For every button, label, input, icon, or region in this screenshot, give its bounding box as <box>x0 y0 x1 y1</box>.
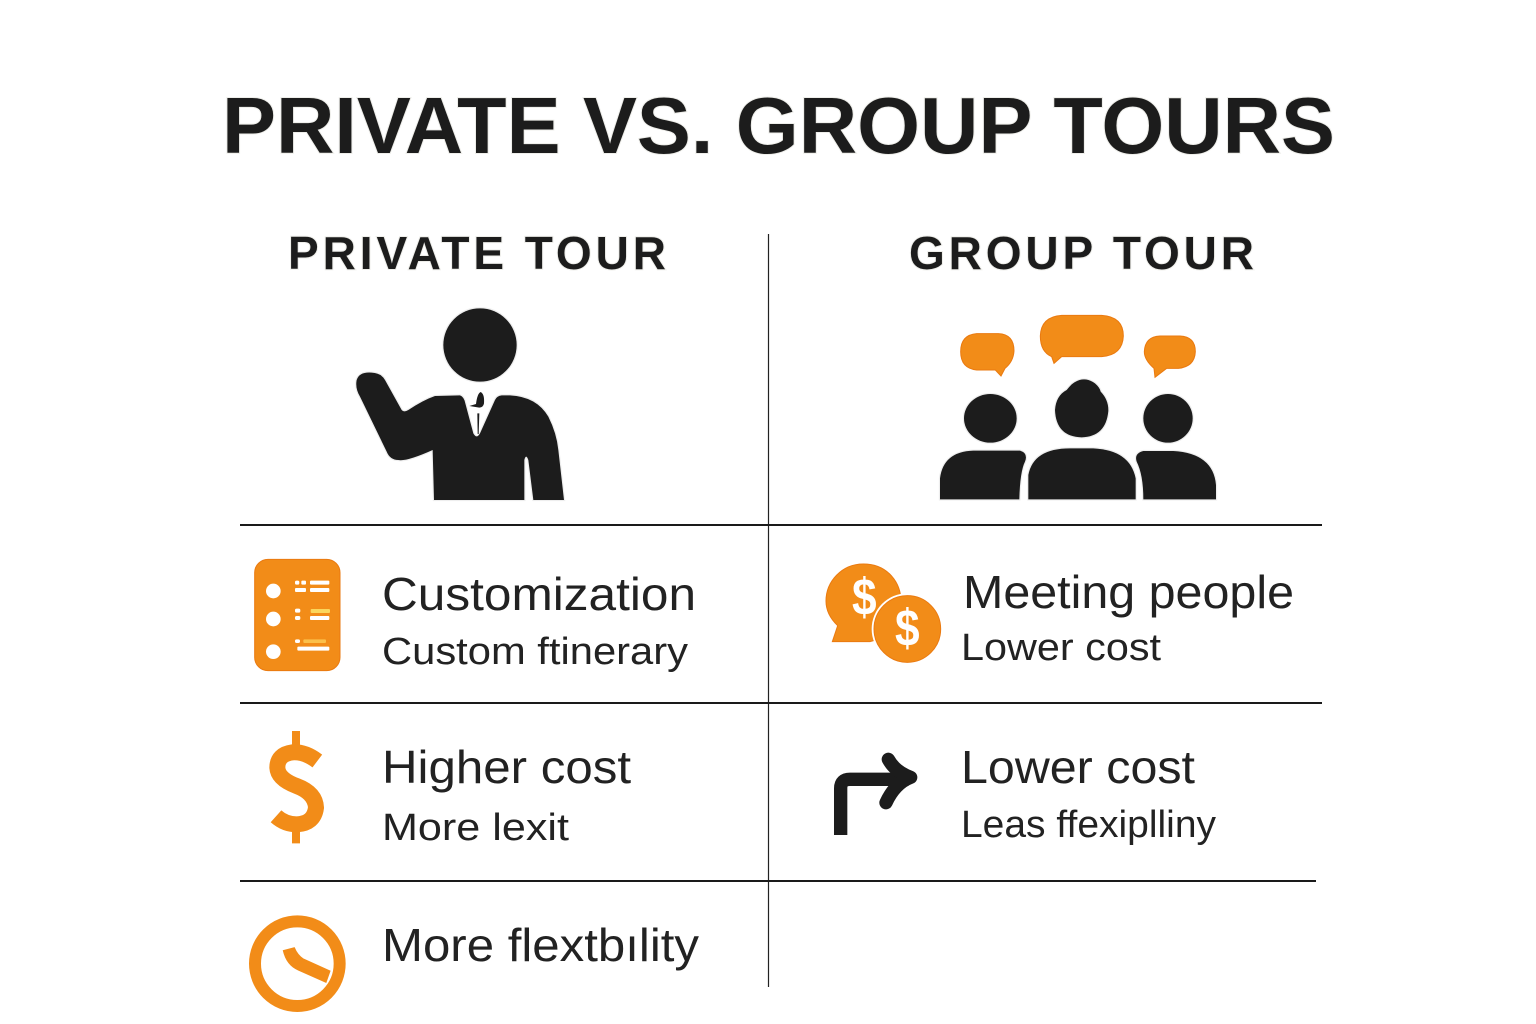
row: customization <box>255 559 696 673</box>
row: higher cost <box>276 731 631 849</box>
label: higher cost: Higher cost <box>382 741 631 793</box>
panel: private tour <box>255 227 699 1006</box>
icon: turn-right arrow <box>841 759 911 835</box>
row: lower cost <box>841 741 1216 846</box>
icon: dollar sign <box>276 731 317 843</box>
sublabel: lower cost: Lower cost <box>961 627 1161 669</box>
heading: private tour: PRIVATE TOUR <box>288 227 666 279</box>
label: more flexibility: More flextbılity <box>382 919 699 971</box>
label: meeting people: Meeting people <box>963 566 1294 618</box>
row: more flexibility <box>255 919 699 1006</box>
icon: clock <box>255 921 340 1006</box>
label: customization: Customization <box>382 568 696 620</box>
sublabel: custom itinerary: Custom ftinerary <box>382 631 688 673</box>
icon: three people with speech bubbles <box>940 315 1216 499</box>
icon: speech bubble and dollar coin: $ <box>895 599 920 658</box>
sublabel: less flexibility: Leas ffexiplliny <box>961 804 1216 846</box>
icon: orange checklist <box>255 559 340 671</box>
icon: person waving <box>356 308 564 500</box>
label: lower cost: Lower cost <box>961 741 1195 793</box>
sublabel: more flexibility: More lexit <box>382 807 569 849</box>
icon: speech bubble and dollar coin <box>826 564 943 665</box>
panel: group tour <box>826 227 1294 846</box>
title: PRIVATE VS. GROUP TOURS <box>222 81 1335 170</box>
icon: speech bubble and dollar coin: $ <box>852 568 877 626</box>
row: meeting people <box>826 564 1294 669</box>
heading: group tour: GROUP TOUR <box>909 227 1254 279</box>
